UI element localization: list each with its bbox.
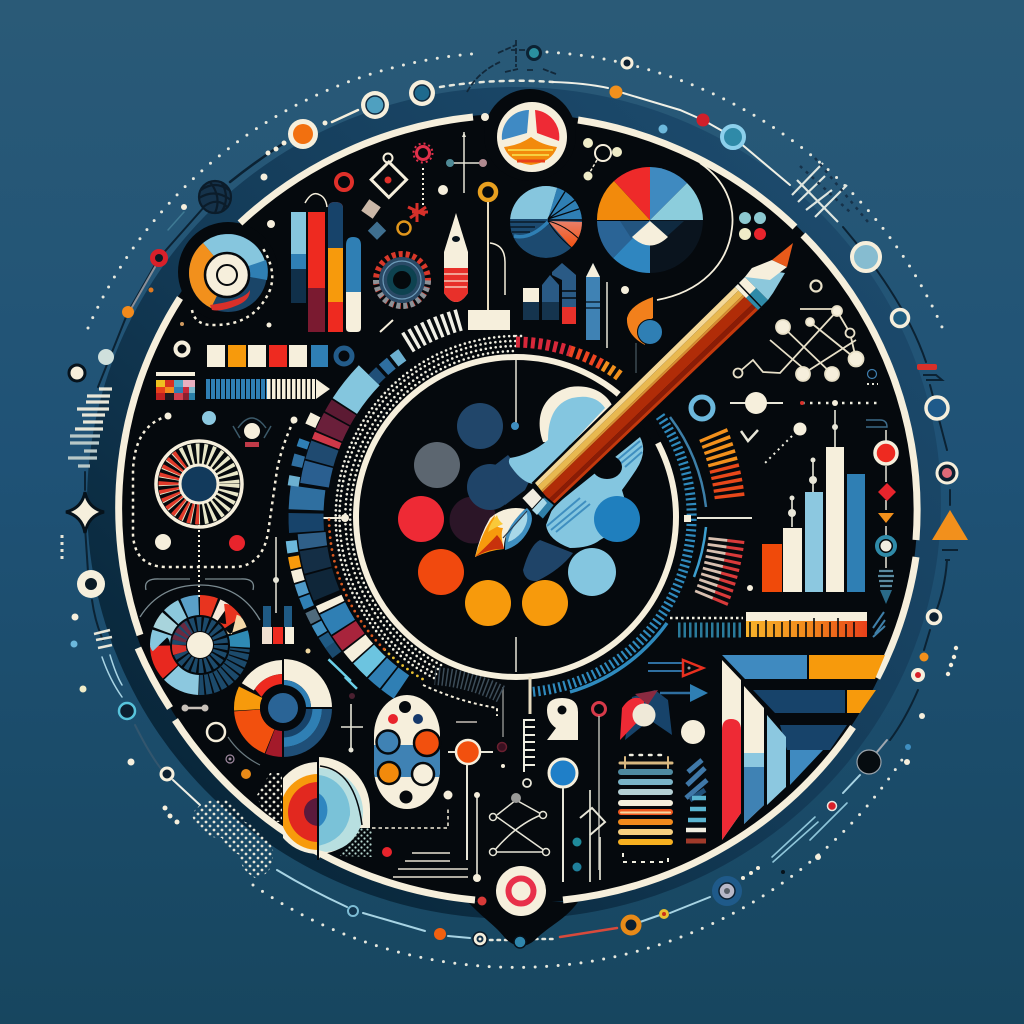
geometric panels — [722, 655, 885, 840]
halftone patches — [257, 773, 372, 857]
palette icon — [374, 695, 440, 809]
diagonal stripe column — [686, 760, 707, 841]
orange fan ticks — [713, 434, 724, 467]
left badge ring chart — [189, 234, 268, 312]
dotted rings — [336, 336, 524, 678]
blue diagonal blocks upper — [236, 237, 796, 797]
bar chart right — [747, 410, 865, 592]
icon: keyhole shape — [547, 698, 578, 740]
top badge pie — [481, 102, 567, 172]
orbit nodes: top — [467, 40, 744, 148]
barcode arrow — [206, 379, 330, 399]
segmented ring around palette — [199, 200, 833, 834]
small figures left — [155, 411, 349, 613]
halftone blob — [192, 800, 273, 878]
right-centre small icons — [684, 392, 882, 522]
small lower-left marks — [182, 693, 363, 779]
sunburst wheel — [156, 441, 242, 527]
comb — [523, 677, 535, 787]
orbit nodes: upper left — [69, 80, 435, 381]
bar chart upper left — [291, 194, 361, 332]
small outer blocks — [199, 200, 833, 834]
ornament curves — [140, 579, 260, 620]
dashed loop left — [133, 416, 294, 567]
icon: gear — [376, 254, 428, 306]
outer dotted orbit — [88, 52, 942, 967]
bottom badge backing — [468, 902, 578, 946]
icon: four point star — [66, 492, 104, 533]
main black disc — [116, 114, 918, 904]
concentric half disc — [283, 757, 370, 860]
grey bottom ticks — [435, 676, 501, 694]
small bar group — [262, 606, 310, 654]
cyan dashes — [328, 659, 357, 689]
orange swirl — [627, 297, 662, 373]
network diagram upper right — [734, 280, 878, 384]
right column icons — [866, 420, 897, 637]
red orange top arc ticks — [516, 342, 570, 351]
molecule icon — [583, 138, 622, 180]
ring segments lower — [226, 227, 806, 807]
thin arc around pie — [657, 163, 733, 300]
small icons upper centre — [336, 132, 510, 332]
ferrule — [521, 487, 555, 520]
orbit nodes: right — [623, 243, 968, 933]
node stems bottom centre — [372, 685, 506, 882]
pie chart two — [597, 167, 703, 273]
icon: pen nib — [444, 213, 468, 302]
red navy shape — [620, 690, 705, 744]
paintbrush — [475, 243, 793, 557]
buildings and pencil — [523, 263, 629, 348]
icon: yarn ball — [199, 181, 231, 213]
striped stack left — [68, 389, 112, 466]
stem icons bottom — [549, 702, 606, 882]
disc cream ring segments — [119, 117, 917, 900]
dashed loop under left badge — [192, 247, 272, 325]
dark halo around main disc — [87, 87, 941, 919]
bottom badge target — [478, 866, 546, 948]
orbit nodes: lower left — [62, 535, 487, 946]
icon: crosshatch — [792, 158, 868, 222]
handle bands — [535, 287, 758, 505]
orange dotted ring — [329, 517, 384, 649]
brush outline — [535, 287, 758, 505]
donut chart — [227, 652, 339, 764]
pie chart one — [510, 186, 582, 258]
network icon bottom — [490, 793, 550, 856]
ruler — [670, 612, 867, 637]
gap in inner ring behind brush — [619, 394, 658, 443]
paint blobs — [398, 360, 643, 672]
ring segments upper — [234, 235, 798, 799]
white radial ticks top — [407, 319, 463, 343]
blue ticks right — [531, 416, 692, 692]
top badge backing — [484, 89, 576, 181]
red grey fan ticks — [718, 540, 736, 606]
outer orbit line — [85, 81, 950, 940]
arrows — [648, 660, 708, 702]
bristles — [475, 508, 532, 557]
yellow dotted ring — [384, 649, 422, 679]
paint cloud — [509, 386, 643, 596]
inner palette circle — [356, 357, 676, 677]
radial segmented pie — [143, 588, 257, 702]
small dots — [180, 220, 275, 328]
four dots — [739, 212, 766, 240]
colour swatch row — [176, 342, 352, 367]
striped stack — [620, 755, 672, 862]
mosaic swatch — [156, 372, 195, 400]
left badge backing — [178, 222, 278, 322]
